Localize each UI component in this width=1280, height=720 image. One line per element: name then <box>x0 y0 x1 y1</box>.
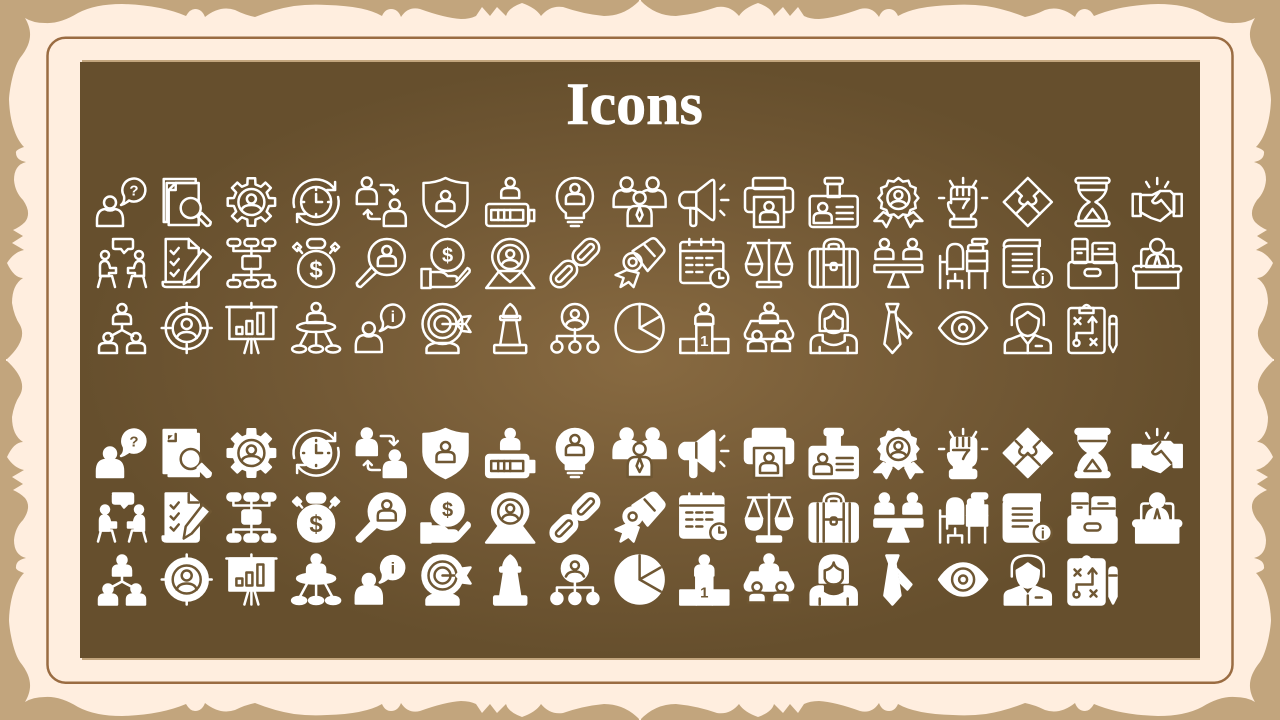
icon: necktie solid <box>884 556 911 604</box>
icon: id badge <box>810 178 858 227</box>
icon: book info solid <box>1004 494 1052 542</box>
icon: fist <box>939 178 987 227</box>
icon: speaker at podium solid <box>1133 494 1181 542</box>
icon: person battery <box>486 178 534 226</box>
icon: presentation board solid <box>226 554 276 604</box>
icon: desk and chair solid <box>940 494 987 542</box>
icon: eye <box>939 312 987 344</box>
icon: book info <box>1004 240 1052 288</box>
icon: clock cycle <box>294 179 339 225</box>
icon: puzzle <box>1004 178 1052 226</box>
icon: desk and chair <box>940 239 987 288</box>
icon: money stopwatch solid <box>293 494 339 542</box>
icon: storage box solid <box>1068 494 1116 542</box>
icon: chain link <box>547 235 603 291</box>
icon: shield person solid <box>424 429 468 478</box>
icon: swap persons <box>357 178 406 226</box>
icon: id badge solid <box>810 429 858 478</box>
icon: checklist pencil <box>163 239 211 287</box>
icon: target person solid <box>162 554 212 604</box>
icon: magnifier person <box>357 239 405 287</box>
icon: hourglass solid <box>1076 429 1110 477</box>
icon: necktie <box>884 304 911 353</box>
icon: award <box>874 178 922 227</box>
outline icon set <box>97 178 1182 353</box>
icon: headset agent solid <box>1005 556 1051 604</box>
icon: hand coin solid <box>422 494 470 542</box>
icon: bulb person solid <box>557 429 593 477</box>
icon: diploma solid <box>616 493 664 542</box>
icon: pie chart solid <box>616 556 664 604</box>
icon: printer <box>745 178 793 227</box>
icon: checklist pencil solid <box>163 494 211 542</box>
icon: fist solid <box>939 429 987 478</box>
icon: swap persons solid <box>357 428 406 477</box>
icon: megaphone solid <box>679 431 728 477</box>
icon: calendar clock solid <box>680 494 728 542</box>
icon: briefcase solid <box>810 494 858 542</box>
icon: map pin person solid <box>486 494 534 542</box>
icon: printer solid <box>745 429 793 478</box>
icon: strategy clipboard solid <box>1068 556 1116 604</box>
icon: target arrow solid <box>422 556 470 604</box>
icon: person info <box>356 305 404 352</box>
icon: woman solid <box>811 556 857 604</box>
icon: woman <box>811 304 857 353</box>
icon: gear person <box>228 178 275 226</box>
icon: shield person <box>424 178 468 227</box>
icon: bulb person <box>557 178 593 226</box>
icon: person question <box>97 179 145 226</box>
icon: chess piece solid <box>494 556 526 604</box>
icon: clock cycle solid <box>294 430 339 476</box>
icon: diploma <box>616 238 664 287</box>
icon: org chart <box>551 304 598 352</box>
icon: briefcase <box>810 239 858 287</box>
icon: chess piece <box>494 304 526 353</box>
icon: strategy clipboard <box>1068 305 1116 353</box>
icon: handshake solid <box>1133 429 1182 472</box>
icon: document search solid <box>164 430 211 477</box>
icon: meeting table <box>745 303 793 351</box>
icon: hand coin <box>422 239 470 288</box>
icon: gear person solid <box>228 429 275 477</box>
icon: conversation solid <box>98 494 146 542</box>
icon: team solid <box>614 428 666 477</box>
icon: flowchart solid <box>227 494 275 542</box>
icon: person battery solid <box>486 429 534 477</box>
icon: magnifier person solid <box>357 494 405 542</box>
solid icon set <box>97 428 1182 604</box>
icon: hierarchy people solid <box>99 556 145 604</box>
icon: calendar clock <box>680 239 728 287</box>
icon: eye solid <box>939 564 987 596</box>
icon: handshake <box>1133 178 1182 221</box>
icon: speaker at podium <box>1133 239 1181 288</box>
title: Icons <box>566 71 703 137</box>
icon: seesaw persons <box>874 239 922 287</box>
icon: conversation <box>98 239 146 287</box>
icon: money stopwatch <box>293 239 339 287</box>
icon: target person <box>162 303 212 353</box>
icon: storage box <box>1068 239 1116 288</box>
icon: pie chart <box>616 304 664 352</box>
icon: hierarchy people <box>99 304 145 353</box>
icon: hourglass <box>1076 178 1110 226</box>
icon: meeting table solid <box>745 554 793 602</box>
panel shadow edge <box>82 60 1200 660</box>
icon: megaphone <box>679 180 728 226</box>
icon: scales solid <box>746 494 792 542</box>
icon: target arrow <box>422 304 470 353</box>
icon: document search <box>164 179 211 226</box>
icon: round table solid <box>292 554 340 604</box>
icon: scales <box>746 240 792 287</box>
icon: flowchart <box>227 239 275 287</box>
icon: person info solid <box>356 556 404 604</box>
icon: winner podium <box>680 304 728 353</box>
icon: person question solid <box>97 430 145 477</box>
icon: team <box>614 178 666 226</box>
icon: round table <box>292 303 340 352</box>
panel: brown background <box>80 62 1200 658</box>
icon: org chart solid <box>551 556 598 604</box>
icon: headset agent <box>1005 304 1051 353</box>
icon: chain link solid <box>547 490 603 545</box>
icon: award solid <box>874 429 922 478</box>
icon: winner podium solid <box>680 556 728 604</box>
icon: map pin person <box>486 239 534 288</box>
icon: seesaw persons solid <box>874 494 922 542</box>
icon: puzzle solid <box>1004 429 1052 477</box>
icon: presentation board <box>226 303 276 353</box>
